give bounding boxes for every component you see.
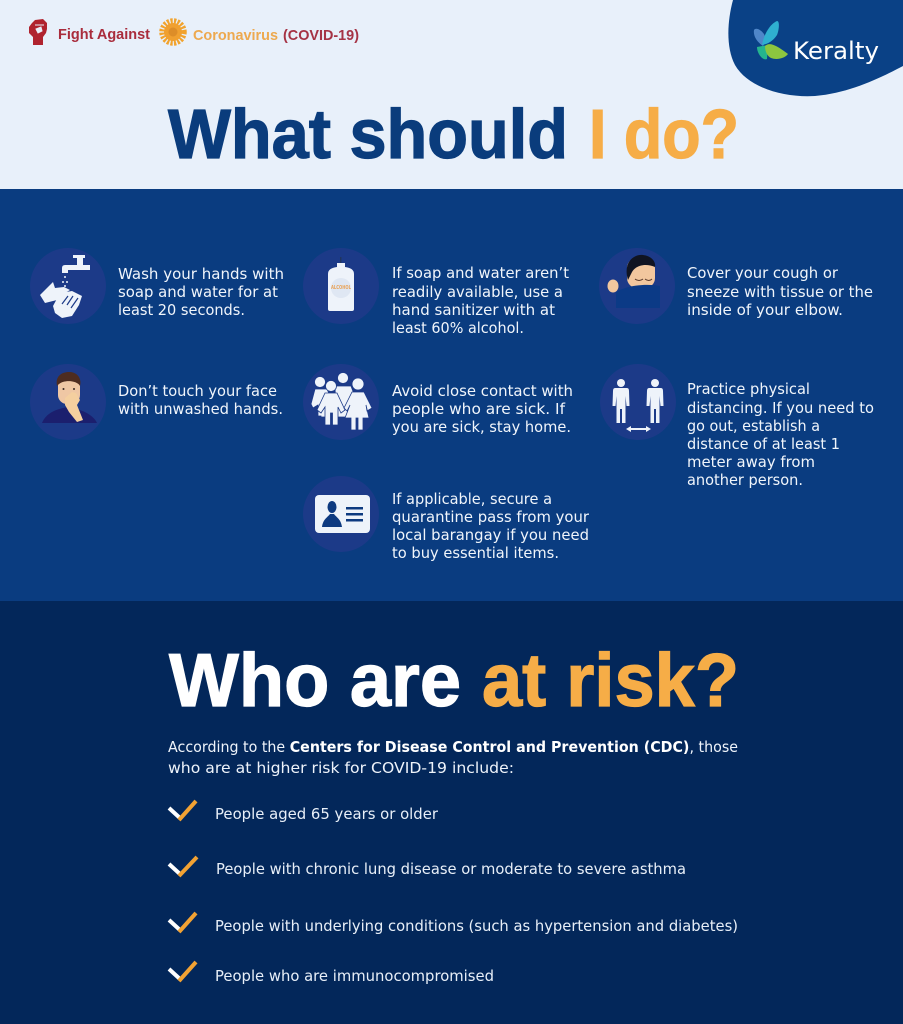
text: you are sick, stay home. bbox=[392, 418, 571, 436]
text: quarantine pass from your bbox=[392, 508, 590, 526]
header panel bbox=[0, 0, 903, 189]
title: What should I do?: What should bbox=[168, 95, 568, 173]
risk item: immunocompromised bbox=[169, 962, 494, 985]
item: do not touch face bbox=[30, 364, 283, 440]
icon: alcohol bottle bbox=[303, 248, 379, 324]
text bbox=[687, 380, 874, 489]
icon: two people with arrow bbox=[600, 364, 676, 440]
text: local barangay if you need bbox=[392, 526, 589, 544]
text: sneeze with tissue or the bbox=[687, 283, 873, 301]
text: least 20 seconds. bbox=[118, 301, 245, 319]
header text: Coronavirus (COVID-19) bbox=[193, 27, 359, 44]
icon: check mark bbox=[169, 913, 196, 932]
item: quarantine pass bbox=[303, 476, 590, 562]
icon: id card bbox=[303, 476, 379, 552]
text: meter away from bbox=[687, 453, 815, 471]
text: inside of your elbow. bbox=[687, 301, 843, 319]
intro paragraph: who are at higher risk for COVID-19 include: bbox=[168, 759, 514, 777]
item: hand sanitizer bbox=[303, 248, 569, 337]
text bbox=[118, 265, 284, 319]
text: go out, establish a bbox=[687, 417, 820, 435]
logo wordmark: Keralty bbox=[793, 37, 879, 65]
icon: man covering face bbox=[30, 364, 106, 440]
text: hand sanitizer with at bbox=[392, 301, 555, 319]
logo: Keralty bbox=[728, 0, 903, 96]
risk item: age: People aged 65 years or older bbox=[215, 805, 439, 823]
text: Wash your hands with bbox=[118, 265, 284, 283]
title: Who are at risk? bbox=[169, 638, 739, 722]
intro paragraph bbox=[168, 738, 738, 777]
text: another person. bbox=[687, 471, 803, 489]
risk item: immunocompromised: People who are immunocompromised bbox=[215, 967, 494, 985]
text: distancing. If you need to bbox=[687, 399, 874, 417]
title: Who are at risk?: at risk? bbox=[482, 638, 739, 722]
icon: check mark bbox=[169, 801, 196, 820]
header text: Fight Against: Fight Against bbox=[58, 26, 150, 43]
text: with unwashed hands. bbox=[118, 400, 283, 418]
text: If soap and water aren’t bbox=[392, 264, 569, 282]
header text: Coronavirus (COVID-19): Coronavirus bbox=[193, 27, 278, 44]
text: to buy essential items. bbox=[392, 544, 559, 562]
header text: Coronavirus (COVID-19): (COVID-19) bbox=[283, 27, 359, 44]
icon: check mark bbox=[169, 857, 197, 876]
panel: what should I do bbox=[0, 189, 903, 601]
text: Avoid close contact with bbox=[392, 382, 573, 400]
item: avoid close contact bbox=[303, 364, 573, 440]
item: physical distancing bbox=[600, 364, 874, 489]
icon: group of people bbox=[303, 364, 379, 440]
text: people who are sick. If bbox=[392, 400, 566, 418]
item: wash hands bbox=[30, 248, 284, 324]
icon: check mark bbox=[169, 962, 196, 981]
text bbox=[687, 264, 873, 319]
text: Don’t touch your face bbox=[118, 382, 277, 400]
icon: tap and hands bbox=[30, 248, 106, 324]
item: cover cough bbox=[599, 248, 873, 324]
icon: alcohol bottle: ALCOHOL bbox=[331, 285, 352, 291]
icon: virus bbox=[162, 21, 184, 43]
panel: who are at risk bbox=[0, 601, 903, 1024]
icon: man sneezing into elbow bbox=[599, 248, 675, 324]
text: least 60% alcohol. bbox=[392, 319, 524, 337]
text: readily available, use a bbox=[392, 283, 563, 301]
text bbox=[118, 382, 283, 418]
title: What should I do?: I do? bbox=[589, 95, 739, 173]
risk item: underlying conditions: People with underlying conditions (such as hypertension and diabetes) bbox=[215, 917, 738, 935]
risk item: age bbox=[169, 801, 439, 823]
intro paragraph: According to the Centers for Disease Control and Prevention (CDC), those bbox=[168, 738, 738, 756]
text: Practice physical bbox=[687, 380, 810, 398]
text bbox=[392, 382, 573, 436]
text: distance of at least 1 bbox=[687, 435, 840, 453]
title: Who are at risk?: Who are bbox=[169, 638, 461, 722]
text: soap and water for at bbox=[118, 283, 278, 301]
text bbox=[392, 490, 590, 562]
risk item: lung disease: People with chronic lung disease or moderate to severe asthma bbox=[216, 860, 686, 878]
icon: butterfly bbox=[754, 21, 788, 59]
text: If applicable, secure a bbox=[392, 490, 552, 508]
text bbox=[392, 264, 569, 337]
text: Cover your cough or bbox=[687, 264, 839, 282]
icon: raised fist bbox=[29, 19, 47, 45]
